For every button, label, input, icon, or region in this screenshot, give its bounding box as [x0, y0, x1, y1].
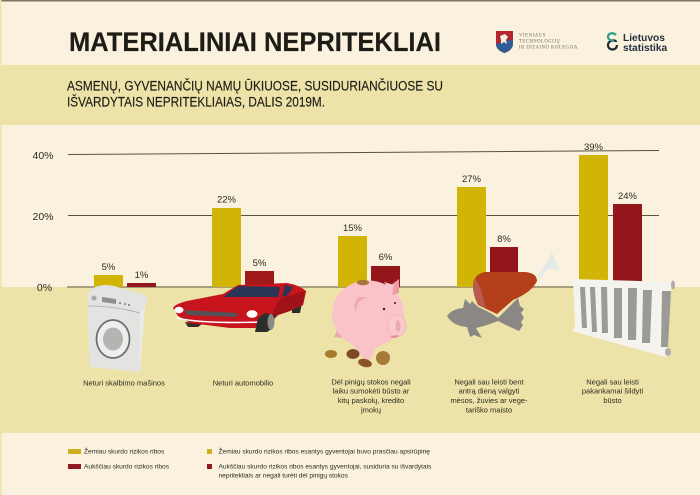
chart: axis labels — [32, 150, 54, 294]
chart: axis labels: 20% — [32, 211, 54, 223]
legend: notes: Žemiau skurdo rizikos ribos esantys gyventojai buvo prasčiau apsirūpinę — [218, 446, 430, 456]
logo: Lietuvos statistika: Lietuvos — [623, 33, 665, 44]
band: subtitle background — [0, 65, 700, 125]
logo: Lietuvos statistika — [608, 33, 668, 54]
category label: heating: būsto — [603, 396, 622, 405]
bars: heating: 24% — [618, 191, 638, 202]
band: illustrations background — [0, 287, 700, 433]
legend: notes: Aukščiau skurdo rizikos ribos esantys gyventojai, susiduria su išvardytais — [218, 464, 432, 470]
bars: heating: 39% — [584, 142, 604, 153]
subtitle — [67, 78, 443, 110]
category label: washing machine: Neturi skalbimo mašinos — [83, 378, 165, 388]
logo: Vilniaus technologijų ir dizaino kolegija: IR DIZAINO KOLEGIJA — [519, 46, 578, 50]
logo: Vilniaus technologijų ir dizaino kolegija: VIENIAUS — [519, 34, 546, 38]
bars: washing machine: 1% — [135, 270, 149, 281]
bars: food: 8% — [497, 234, 511, 245]
legend: bars — [68, 446, 170, 470]
category label: heating: pakankamai šildyti — [582, 386, 643, 396]
logo: Lietuvos statistika: statistika — [623, 43, 668, 54]
icon: piggy bank with coins — [325, 279, 406, 369]
icon: red car — [173, 283, 306, 332]
chart: axis labels: 40% — [32, 150, 54, 162]
bars: car: 5% — [253, 258, 267, 269]
category label: debts: įmokų — [361, 406, 381, 414]
bars: debts — [338, 223, 400, 287]
category label: food: antrą dieną valgyti — [459, 386, 520, 396]
category label: debts: kitų paskolų, kredito — [338, 396, 404, 405]
bars: food: 27% — [462, 174, 482, 185]
category label: heating: Negali sau leisti — [586, 378, 639, 386]
chart: axis labels: 0% — [37, 282, 52, 294]
legend: notes: nepritekliais ar negali turėti dėl pinigų stokos — [218, 472, 349, 480]
legend: bars: Aukščiau skurdo rizikos ribos — [84, 464, 170, 470]
title: MATERIALINIAI NEPRITEKLIAI — [69, 27, 441, 57]
category label: heating — [582, 378, 643, 405]
legend: bars: Žemiau skurdo rizikos ribos — [84, 446, 165, 456]
category label: food — [450, 378, 528, 414]
category label: car: Neturi automobilio — [213, 378, 273, 388]
bars: washing machine — [94, 262, 156, 287]
subtitle: ASMENŲ, GYVENANČIŲ NAMŲ ŪKIUOSE, SUSIDURIANČIUOSE SU — [67, 78, 443, 94]
category label: debts — [331, 378, 411, 414]
bars: debts: 15% — [343, 223, 363, 234]
bars: car — [212, 194, 274, 287]
category label: food: mėsos, žuvies ar vege- — [450, 396, 528, 405]
legend: notes — [207, 446, 432, 480]
category label: food: Negali sau leisti bent — [454, 378, 525, 386]
bars: heating — [579, 142, 642, 287]
logo: Vilniaus technologijų ir dizaino kolegija: TECHNOLOGIJŲ — [519, 40, 561, 44]
icon: meat and fish — [447, 252, 560, 338]
bars: car: 22% — [217, 194, 237, 206]
logo: Vilniaus technologijų ir dizaino kolegija — [496, 31, 578, 53]
category label: debts: laiku sumokėti būsto ar — [333, 386, 410, 396]
bars: food — [457, 174, 518, 287]
bars: washing machine: 5% — [102, 262, 116, 273]
subtitle: IŠVARDYTAIS NEPRITEKLIAIAS, DALIS 2019M. — [67, 94, 325, 110]
bars: debts: 6% — [379, 252, 393, 263]
icon: washing machine — [88, 285, 148, 372]
category label: food: tariško maisto — [466, 406, 512, 414]
icon: radiator — [572, 279, 675, 357]
category label: debts: Dėl pinigų stokos negali — [331, 378, 411, 386]
chart: grid lines — [67, 150, 659, 287]
